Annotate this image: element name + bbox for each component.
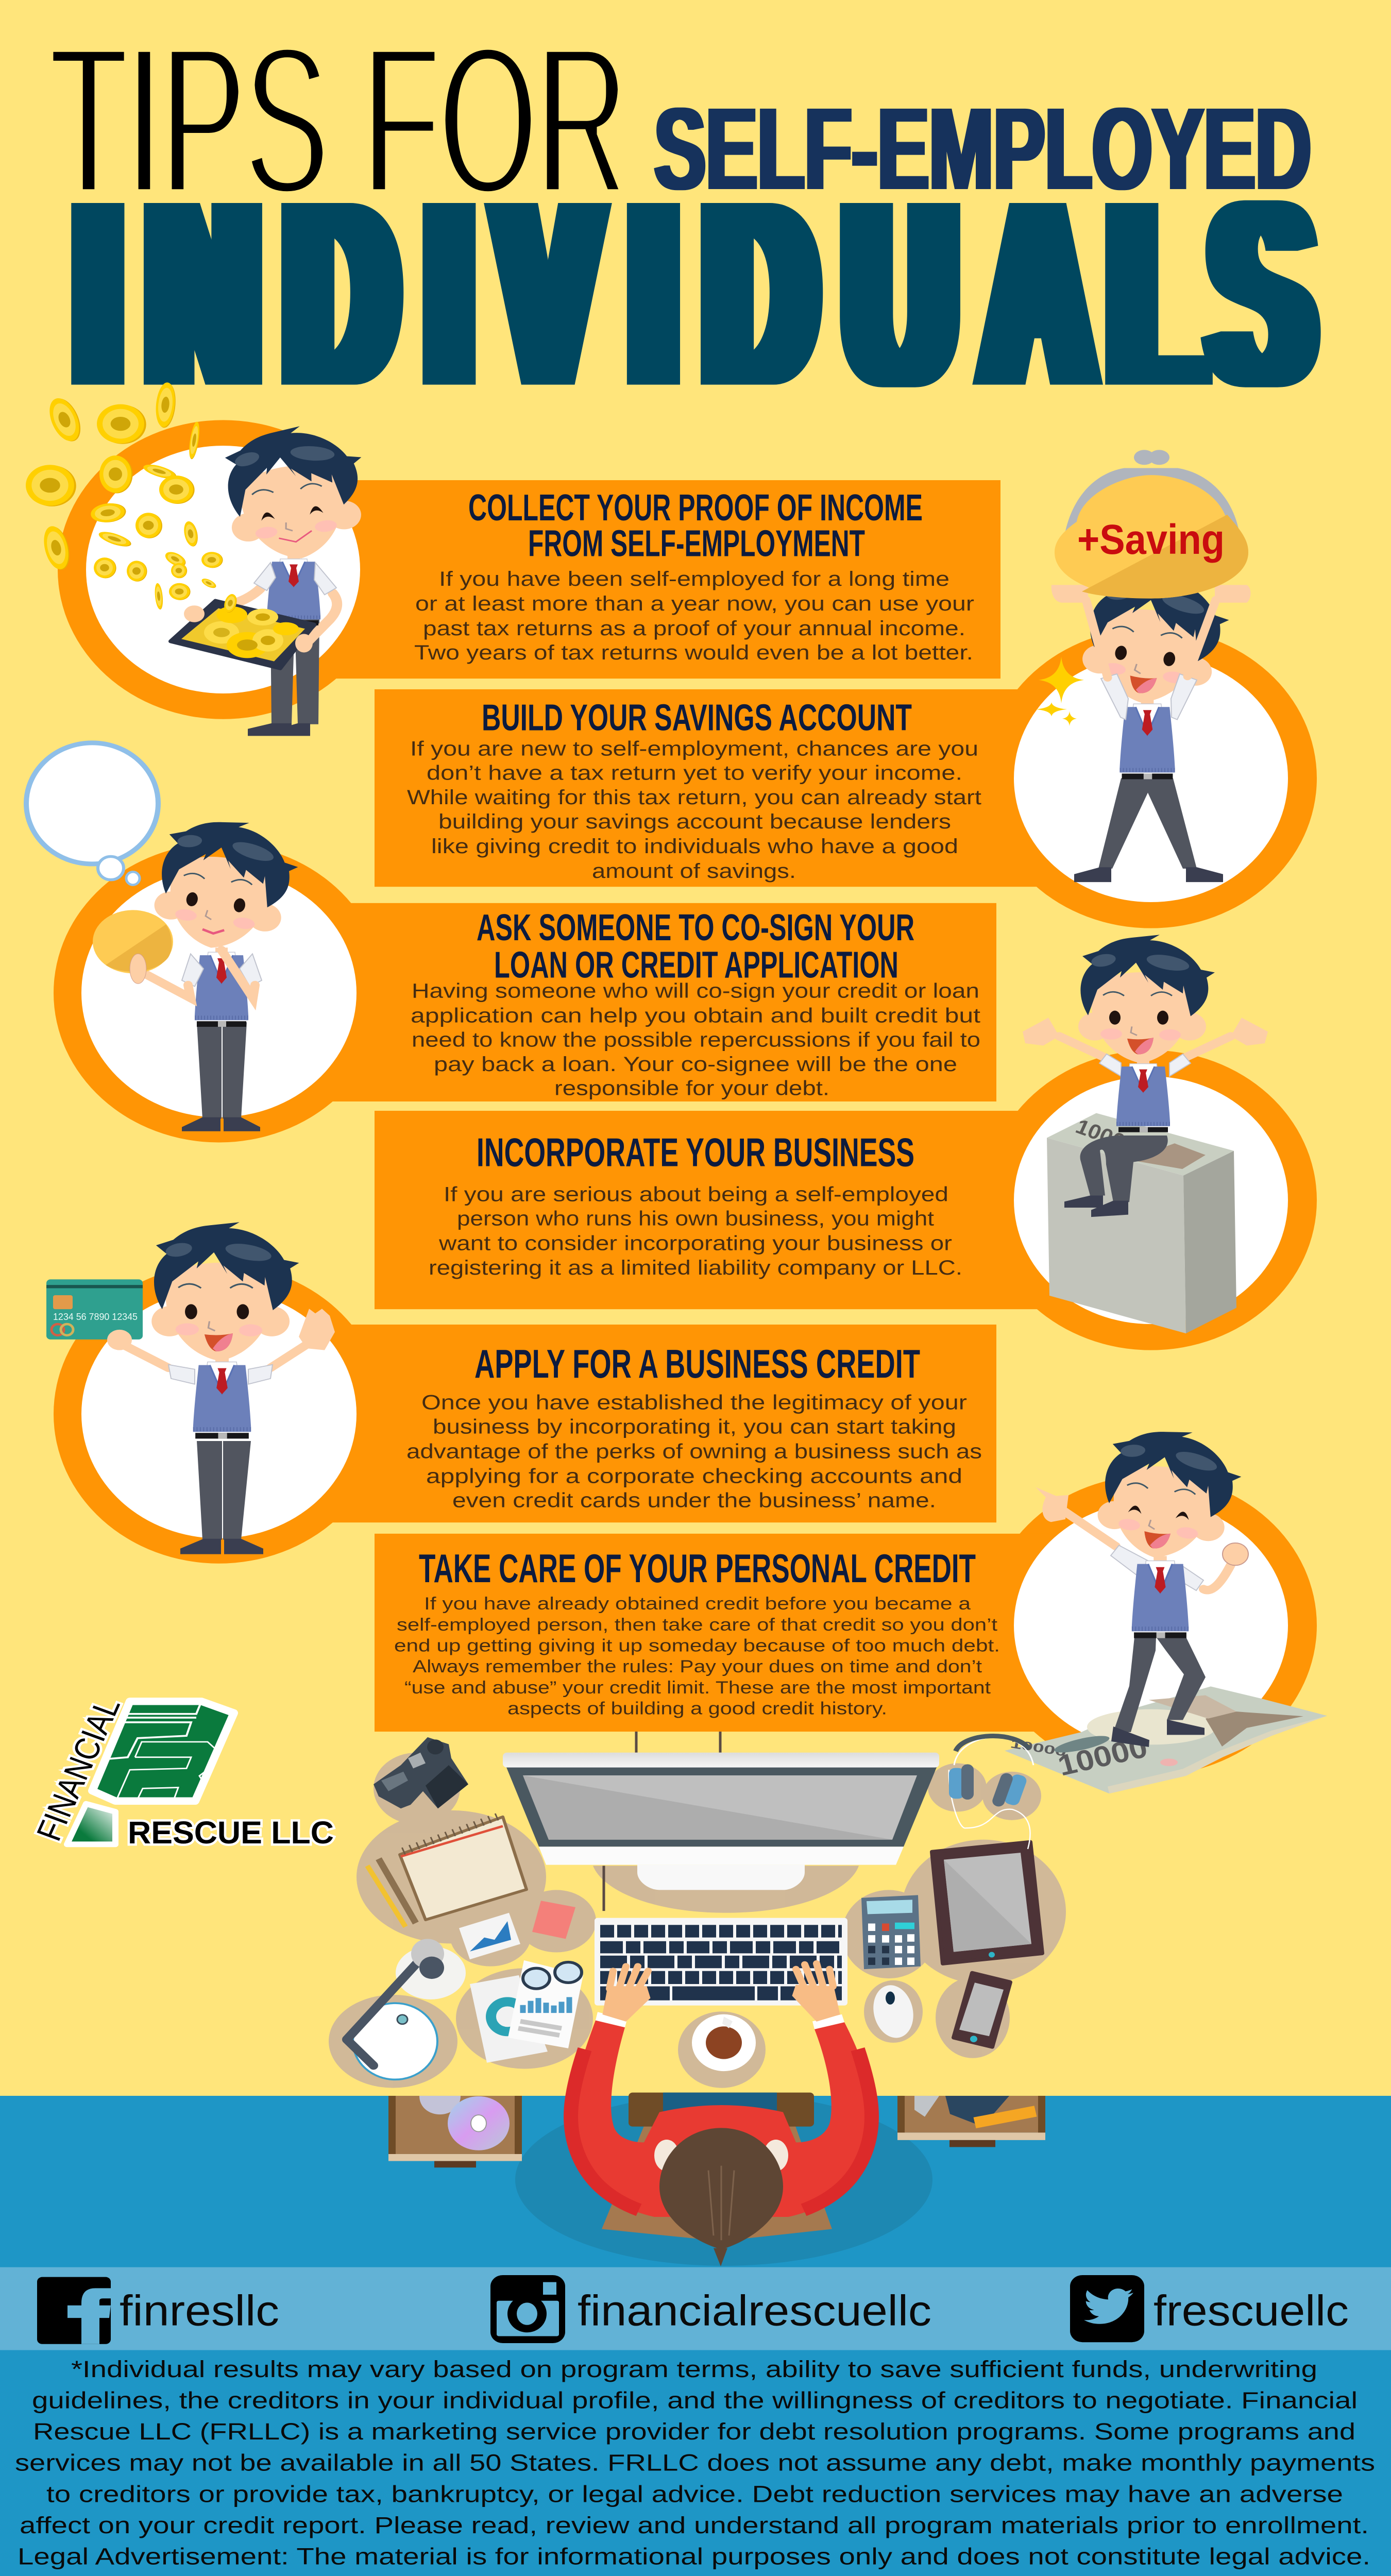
character 4: man sitting on money stack: [1023, 935, 1268, 1333]
panel 4: incorporate: want to consider incorporating your business or: [438, 1231, 952, 1255]
panel 5: business credit: APPLY FOR A BUSINESS CREDIT: [474, 1342, 920, 1386]
panel 5: business credit: applying for a corporate checking accounts and: [426, 1464, 962, 1487]
icon: banknote: 10000: [1055, 1731, 1151, 1782]
disclaimer text: services may not be available in all 50 States. FRLLC does not assume any debt, make monthly payments: [15, 2450, 1375, 2476]
icon: camera: [374, 1737, 468, 1808]
panel 5: business credit: Once you have established the legitimacy of your: [421, 1391, 967, 1414]
social: twitter: frescuellc: [1153, 2287, 1349, 2335]
panel 5: business credit: [54, 1264, 996, 1564]
icon: chart paper: [459, 1913, 520, 1959]
icon: thought bubble: [26, 743, 158, 885]
disclaimer text: guidelines, the creditors in your individual profile, and the willingness of creditors to negotiate. Financial: [32, 2388, 1358, 2414]
disclaimer text: affect on your credit report. Please read, review and understand all program materials prior to enrollment.: [20, 2513, 1369, 2538]
icon: falling coins: [26, 382, 223, 610]
social band: [0, 2267, 1391, 2350]
panel 2: build savings account: like giving credit to individuals who have a good: [431, 835, 958, 858]
panel 1: collect proof of income: COLLECT YOUR PROOF OF INCOME: [468, 487, 923, 529]
icon: desk lamp: [347, 1939, 466, 2079]
icon: purse: +Saving: [1077, 516, 1225, 563]
icon: coffee cup: [692, 2014, 756, 2071]
panel 3: co-sign: responsible for your debt.: [554, 1076, 829, 1099]
icon: mouse: [869, 1982, 918, 2041]
panel 2: build savings account: BUILD YOUR SAVINGS ACCOUNT: [482, 697, 912, 739]
logo: Financial Rescue LLC: FINANCIAL: [29, 1692, 128, 1845]
disclaimer text: Rescue LLC (FRLLC) is a marketing service provider for debt resolution programs. Some programs and: [33, 2419, 1355, 2445]
icon: right drawer with card: [897, 2096, 1045, 2147]
title: INDIVIDUALS: INDIVIDUALS: [77, 145, 1311, 440]
panel 5: business credit: business by incorporating it, you can start taking: [433, 1415, 956, 1438]
panel 1: collect proof of income: past tax returns as a proof of your annual income.: [423, 617, 965, 640]
disclaimer text: Legal Advertisement: The material is for informational purposes only and does not constitute legal advice.: [18, 2544, 1370, 2570]
panel 4: incorporate: INCORPORATE YOUR BUSINESS: [477, 1130, 914, 1175]
icon: banknote: [1005, 1686, 1327, 1793]
disclaimer text: *Individual results may vary based on program terms, ability to save sufficient funds, underwriting: [71, 2357, 1317, 2382]
shadow blobs: [329, 1753, 1066, 2088]
panel 3: co-sign: LOAN OR CREDIT APPLICATION: [494, 944, 898, 986]
disclaimer text: [15, 2357, 1375, 2570]
icon: calculator: [861, 1895, 921, 1969]
character 6: man standing on banknote: [1005, 1422, 1327, 1793]
panel 2: build savings account: While waiting for this tax return, you can already start: [407, 786, 981, 809]
icon: credit card: [46, 1279, 143, 1340]
icon: banknote: 10000: [1009, 1737, 1067, 1759]
logo: Financial Rescue LLC: RESCUE LLC: [128, 1815, 334, 1850]
logo: Financial Rescue LLC: [29, 1692, 334, 1850]
icon: money stack: [1047, 1113, 1236, 1333]
panel 3: co-sign: [54, 843, 996, 1143]
illustration: desk scene: [329, 1732, 1066, 2266]
icon: credit card: 1234 56 7890 12345: [53, 1312, 138, 1323]
character 5: man holding credit card: [46, 1222, 335, 1554]
icon: sticky note: [532, 1901, 575, 1939]
panel 6: personal credit: end up getting giving it up someday because of too much debt.: [394, 1635, 1000, 1655]
icon: documents and glasses: [470, 1960, 583, 2063]
social: twitter: [1070, 2275, 1349, 2342]
social: instagram: [490, 2275, 931, 2343]
panel 6: personal credit: aspects of building a good credit history.: [507, 1698, 887, 1718]
icon: tablet: [932, 1842, 1042, 1963]
panel 5: business credit: even credit cards under the business’ name.: [452, 1488, 936, 1512]
panel 1: collect proof of income: If you have been self-employed for a long time: [439, 567, 949, 590]
panel 1: collect proof of income: FROM SELF-EMPLOYMENT: [528, 523, 865, 564]
character 3: thinking man with purse: [93, 812, 304, 1131]
panel 2: build savings account: If you are new to self-employment, chances are you: [410, 737, 978, 760]
icon: keyboard: [595, 1918, 847, 2006]
title: TIPS FOR: TIPS FOR: [50, 3, 627, 238]
panel 6: personal credit: TAKE CARE OF YOUR PERSONAL CREDIT: [419, 1547, 976, 1591]
panel 6: personal credit: Always remember the rules: Pay your dues on time and don’t: [413, 1656, 982, 1676]
panel 5: business credit: advantage of the perks of owning a business such as: [406, 1439, 982, 1463]
cables: [604, 1732, 720, 1911]
panel 2: build savings account: amount of savings.: [592, 859, 796, 883]
social: facebook: finresllc: [120, 2287, 279, 2335]
panel 6: personal credit: [375, 1476, 1317, 1775]
panel 6: personal credit: “use and abuse” your credit limit. These are the most important: [404, 1677, 991, 1698]
panel 6: personal credit: If you have already obtained credit before you became a: [424, 1594, 971, 1614]
icon: money stack: 10000: [1072, 1114, 1140, 1157]
panel 4: incorporate: person who runs his own business, you might: [457, 1207, 934, 1230]
panel 3: co-sign: need to know the possible repercussions if you fail to: [412, 1028, 980, 1051]
panel 2: build savings account: don’t have a tax return yet to verify your income.: [427, 761, 962, 784]
panel 3: co-sign: pay back a loan. Your co-signee will be the one: [434, 1053, 957, 1076]
panel 3: co-sign: application can help you obtain and built credit but: [411, 1004, 980, 1027]
icon: phone: [954, 1973, 1010, 2047]
panel 1: collect proof of income: or at least more than a year now, you can use your: [415, 592, 974, 615]
panel 3: co-sign: ASK SOMEONE TO CO-SIGN YOUR: [477, 907, 914, 948]
panel 4: incorporate: registering it as a limited liability company or LLC.: [429, 1256, 962, 1279]
panel 6: personal credit: self-employed person, then take care of that credit so you don’t: [397, 1615, 997, 1634]
panel 2: build savings account: [375, 628, 1317, 928]
icon: monitor: [503, 1753, 939, 1890]
blue floor band: [0, 2096, 1391, 2576]
panel 1: collect proof of income: [58, 420, 1000, 719]
panel 4: incorporate: [375, 1050, 1317, 1350]
icon: notebook and pens: [367, 1816, 527, 1927]
social: instagram: financialrescuellc: [578, 2287, 931, 2335]
panel 4: incorporate: If you are serious about being a self-employed: [444, 1182, 948, 1206]
icon: small purse: [93, 910, 173, 973]
icon: floor shadow: [515, 2093, 932, 2266]
icon: left drawer with CDs: [388, 2096, 522, 2167]
icon: person at desk: [571, 1963, 874, 2266]
character 1: man with tablet of coins: [171, 419, 376, 736]
icon: purse: [1055, 450, 1248, 599]
character 2: man lifting +Saving purse: [1036, 450, 1251, 882]
panel 3: co-sign: Having someone who will co-sign your credit or loan: [412, 979, 979, 1002]
panel 2: build savings account: building your savings account because lenders: [438, 810, 951, 833]
icon: sparkles: [1036, 657, 1084, 726]
icon: headphones: [949, 1736, 1033, 1849]
social: facebook: [37, 2277, 279, 2344]
panel 1: collect proof of income: Two years of tax returns would even be a lot better.: [414, 641, 973, 664]
disclaimer text: to creditors or provide tax, bankruptcy, or legal advice. Debt reduction services may have an adverse: [46, 2481, 1343, 2507]
